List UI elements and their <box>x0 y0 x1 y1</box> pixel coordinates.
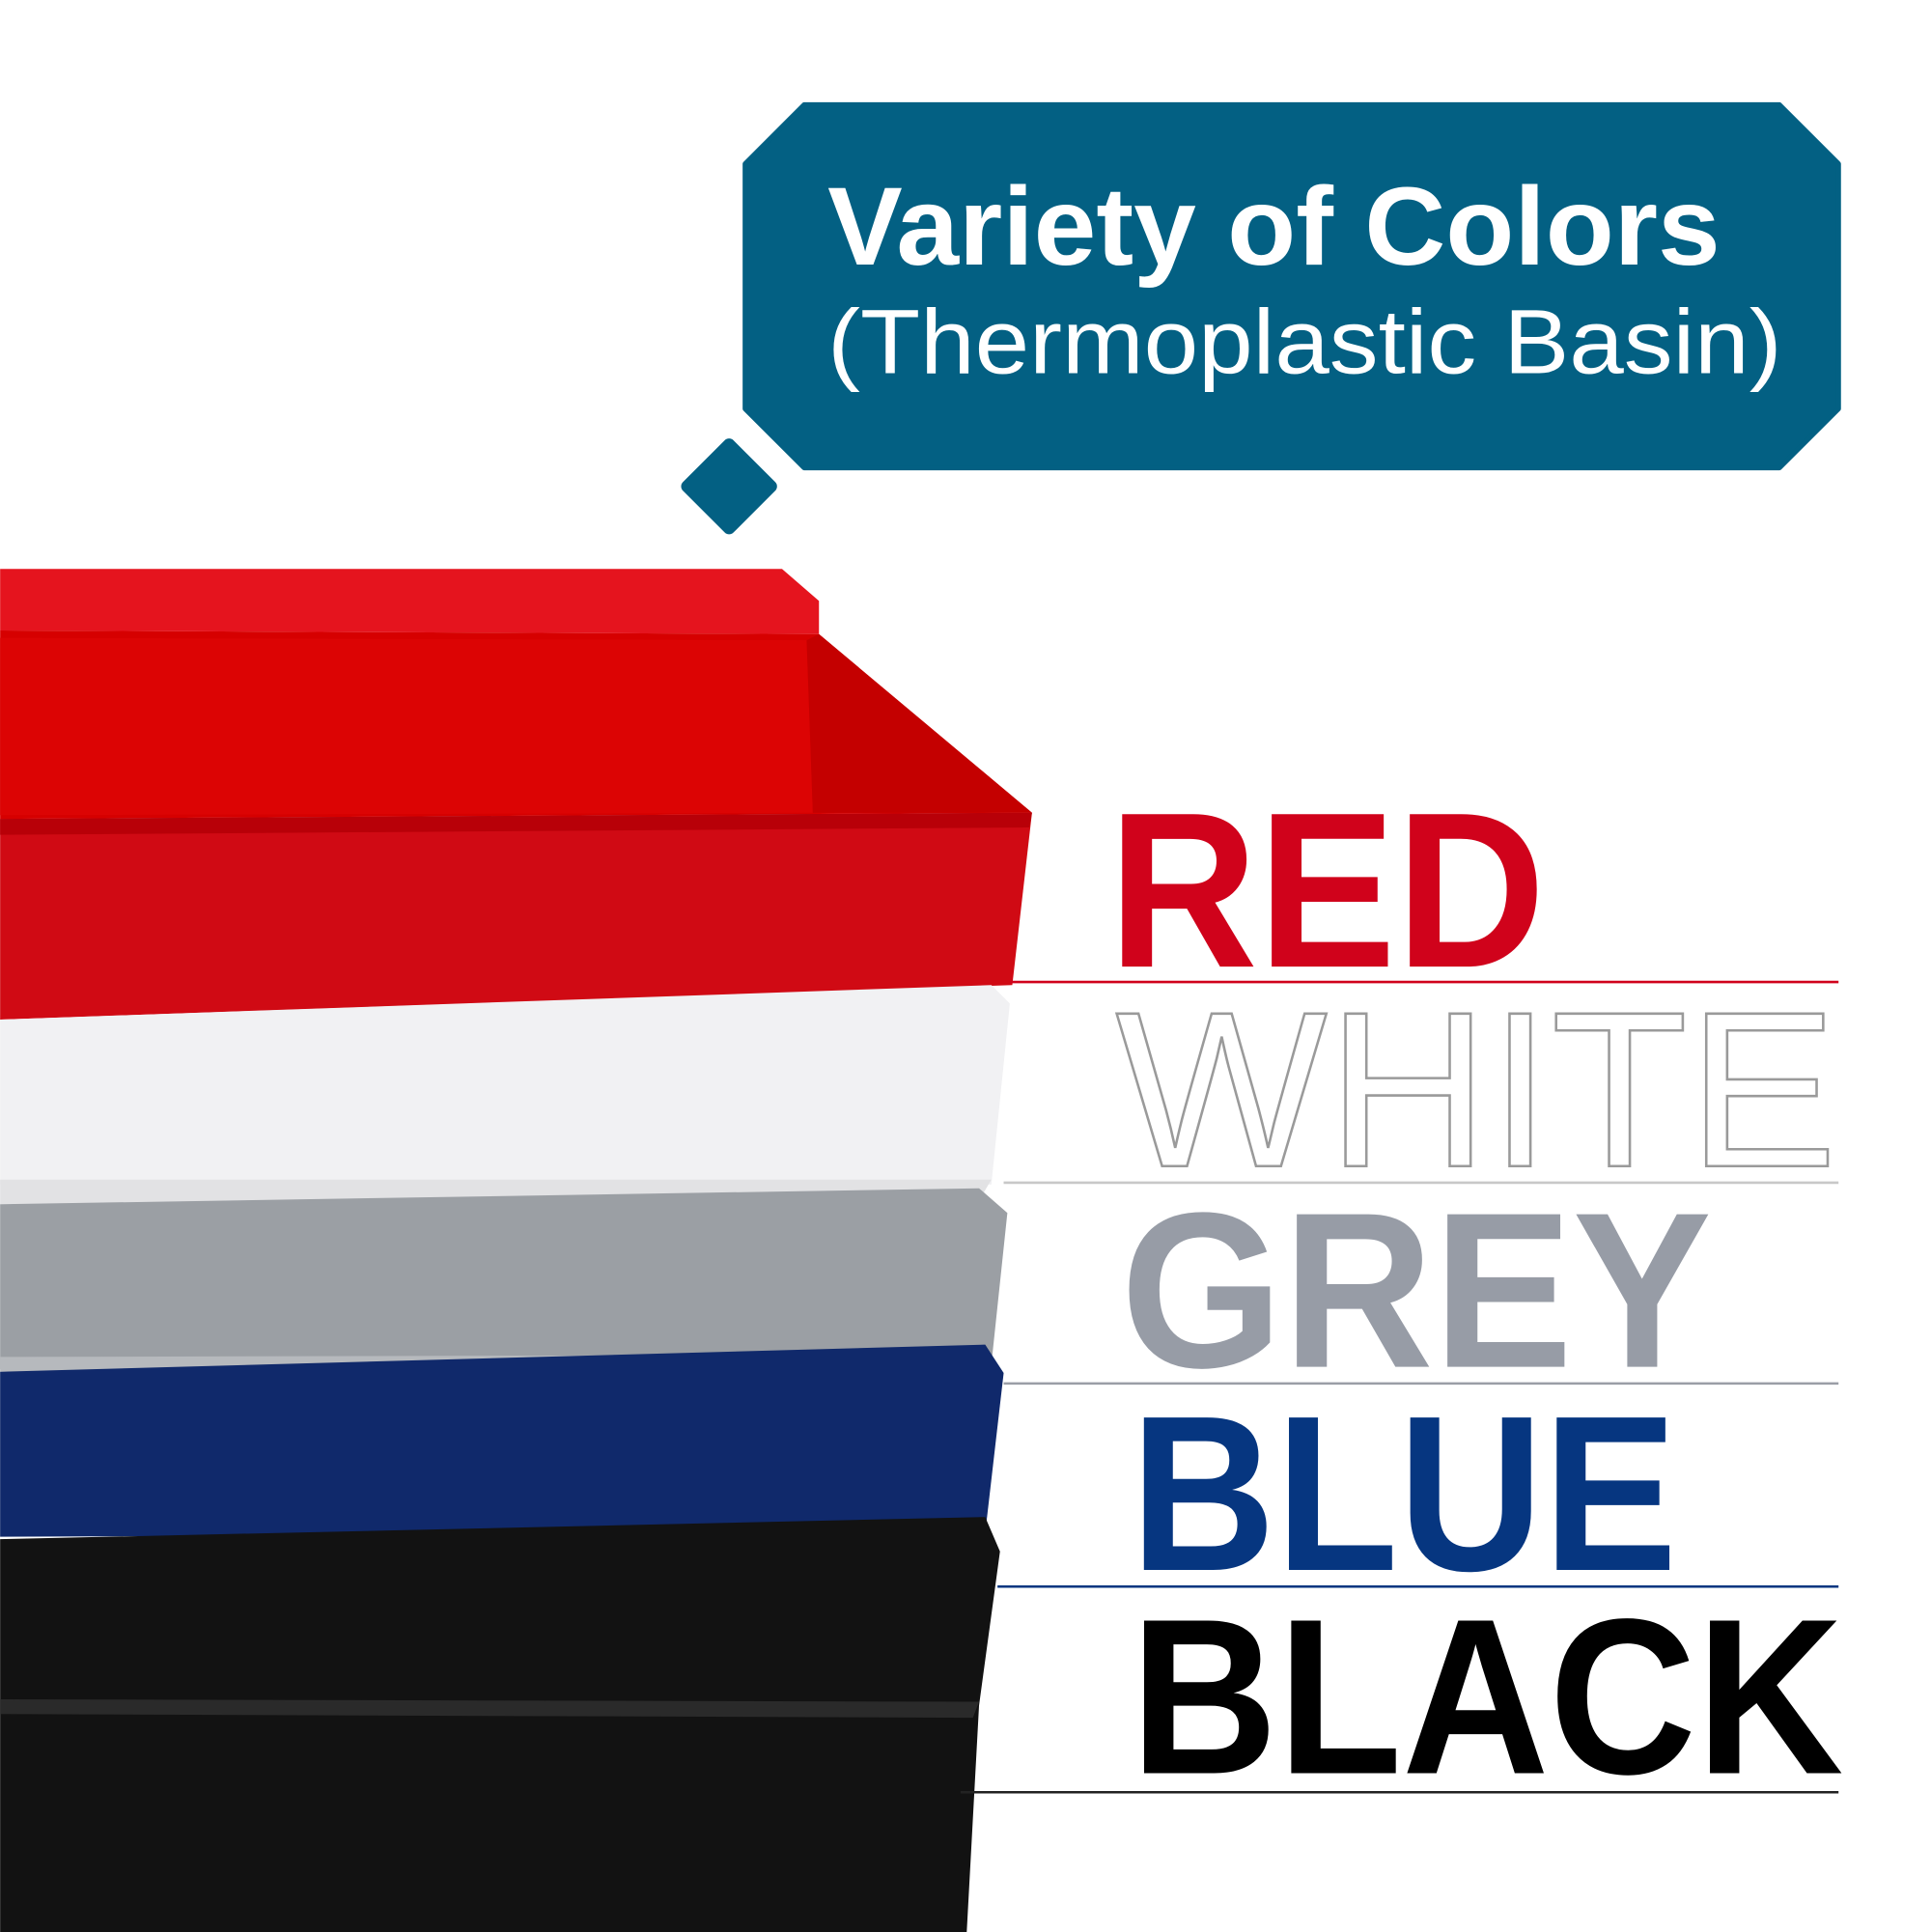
title banner <box>745 104 1838 468</box>
basin: black <box>0 1517 1000 1932</box>
color label: BLACK: BLACK <box>1131 1572 1843 1820</box>
title text: Variety of Colors <box>827 165 1721 289</box>
color label: BLUE: BLUE <box>1131 1369 1677 1617</box>
color label: RED: RED <box>1108 766 1546 1014</box>
color label: WHITE: WHITE <box>1116 966 1837 1214</box>
basin: white <box>0 985 1010 1204</box>
basin: grey <box>0 1189 1007 1372</box>
subtitle text: (Thermoplastic Basin) <box>827 291 1782 392</box>
basin: red <box>0 569 1032 1020</box>
basin stack photo <box>0 569 1032 1932</box>
basin: blue <box>0 1345 1004 1537</box>
color label: GREY: GREY <box>1121 1166 1712 1414</box>
icon: diamond pointer <box>679 435 779 537</box>
